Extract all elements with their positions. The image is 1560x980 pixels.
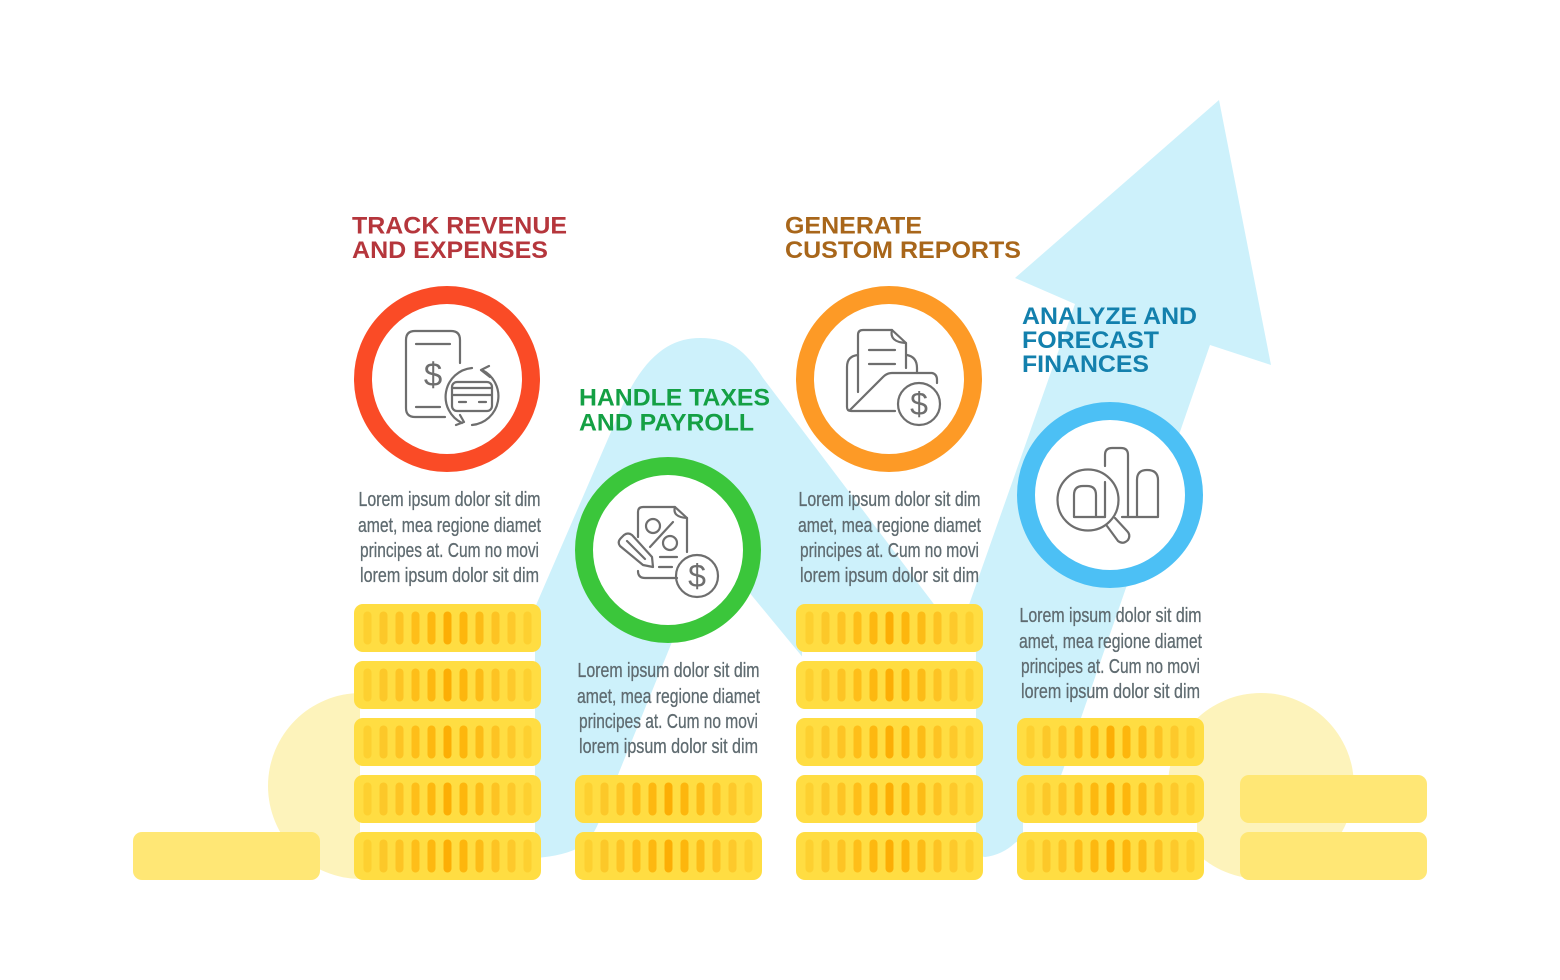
heading: handle taxes: HANDLE TAXES — [579, 384, 770, 412]
heading: generate custom reports: CUSTOM REPORTS — [785, 237, 1021, 264]
icon: magnifier over bar chart — [1058, 448, 1158, 543]
body text: principes at. Cum no movi — [800, 539, 979, 562]
plain coin left — [133, 832, 320, 880]
icon: tax document and pencil — [619, 507, 718, 597]
body text: lorem ipsum dolor sit dim — [360, 564, 539, 587]
growth arrow background — [430, 100, 1271, 858]
red ring — [363, 295, 531, 463]
body text: lorem ipsum dolor sit dim — [579, 735, 758, 758]
panel: track revenue and expenses — [352, 212, 567, 587]
heading: generate custom reports: GENERATE — [785, 212, 922, 240]
coin stack 2 — [575, 775, 762, 880]
background circle left — [268, 693, 454, 879]
body text: lorem ipsum dolor sit dim — [800, 564, 979, 587]
heading: analyze and forecast finances: ANALYZE AND — [1022, 303, 1197, 330]
panel: generate custom reports — [785, 212, 1021, 587]
body text: principes at. Cum no movi — [360, 539, 539, 562]
background circle right — [1168, 693, 1354, 879]
panel: handle taxes and payroll — [577, 384, 770, 758]
body text: amet, mea regione diamet — [577, 685, 760, 708]
body text: Lorem ipsum dolor sit dim — [358, 488, 540, 511]
orange ring — [805, 295, 973, 463]
plain coins right — [1240, 775, 1427, 880]
icon: folder with report — [847, 330, 940, 425]
green ring — [584, 466, 752, 634]
body text: lorem ipsum dolor sit dim — [1021, 680, 1200, 703]
body text: principes at. Cum no movi — [1021, 655, 1200, 678]
coin stack 1 — [354, 604, 541, 880]
heading: analyze and forecast finances: FINANCES — [1022, 351, 1149, 378]
panel: analyze and forecast finances — [1019, 303, 1202, 703]
coin stack 3 — [796, 604, 983, 880]
blue ring — [1026, 411, 1194, 579]
icon: phone and card: $ — [424, 356, 442, 393]
heading: track revenue: AND EXPENSES — [352, 237, 548, 264]
body text: Lorem ipsum dolor sit dim — [798, 488, 980, 511]
body text: amet, mea regione diamet — [358, 514, 541, 537]
coin stack 4 — [1017, 718, 1204, 880]
body text: Lorem ipsum dolor sit dim — [1020, 604, 1202, 627]
body text: Lorem ipsum dolor sit dim — [578, 659, 760, 682]
heading: analyze and forecast finances: FORECAST — [1022, 327, 1159, 354]
icon: tax document and pencil: $ — [688, 558, 706, 594]
body text: amet, mea regione diamet — [798, 514, 981, 537]
body text: amet, mea regione diamet — [1019, 630, 1202, 653]
heading: handle taxes: AND PAYROLL — [579, 410, 754, 436]
heading: track revenue: TRACK REVENUE — [352, 212, 567, 240]
body text: principes at. Cum no movi — [579, 710, 758, 733]
white backing behind coin stacks — [360, 650, 1197, 835]
icon: folder with report: $ — [910, 386, 928, 422]
icon: phone and card — [406, 331, 498, 425]
